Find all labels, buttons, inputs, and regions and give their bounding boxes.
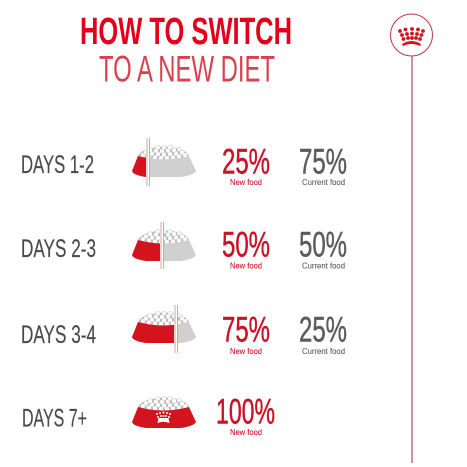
title: TO A NEW DIET [99, 48, 275, 90]
icon: bowl 25 percent [132, 138, 196, 186]
stat: 25 percent new food: 25% [222, 142, 270, 182]
stat: 25 percent current food: Current food [302, 346, 345, 356]
icon: royal crown badge with vertical line [390, 14, 432, 463]
stat: 25 percent current food [299, 310, 347, 356]
title: HOW TO SWITCH [80, 11, 292, 53]
stat: 75 percent new food [222, 310, 270, 356]
stat: 75 percent current food [299, 142, 347, 187]
stat: 50 percent new food [222, 226, 270, 270]
stat: 25 percent new food: New food [230, 177, 262, 187]
row: days 7+ [22, 392, 275, 437]
title [80, 11, 292, 90]
label: days 1-2: DAYS 1-2 [21, 151, 94, 179]
row: days 1-2 [21, 138, 347, 187]
row: days 3-4 [21, 305, 347, 356]
stat: 100 percent new food: 100% [216, 392, 275, 432]
label: days 7+: DAYS 7+ [22, 404, 87, 432]
stat: 75 percent new food: New food [230, 346, 262, 356]
stat: 100 percent new food [216, 392, 275, 437]
stat: 50 percent new food: 50% [222, 226, 270, 264]
row: days 2-3 [21, 222, 347, 270]
stat: 50 percent current food [299, 226, 347, 270]
stat: 25 percent new food [222, 142, 270, 187]
stat: 75 percent new food: 75% [222, 310, 270, 350]
stat: 100 percent new food: New food [230, 427, 262, 437]
stat: 50 percent current food: Current food [302, 260, 345, 270]
icon: bowl 75 percent [132, 305, 196, 353]
icon: bowl 50 percent [132, 222, 196, 269]
stat: 25 percent current food: 25% [299, 310, 347, 350]
label: days 2-3: DAYS 2-3 [21, 235, 96, 263]
stat: 50 percent current food: 50% [299, 226, 347, 264]
stat: 50 percent new food: New food [230, 260, 262, 270]
label: days 3-4: DAYS 3-4 [21, 321, 96, 349]
stat: 75 percent current food: 75% [299, 142, 347, 182]
stat: 75 percent current food: Current food [302, 177, 345, 187]
icon: full red bowl with crown [132, 396, 196, 428]
